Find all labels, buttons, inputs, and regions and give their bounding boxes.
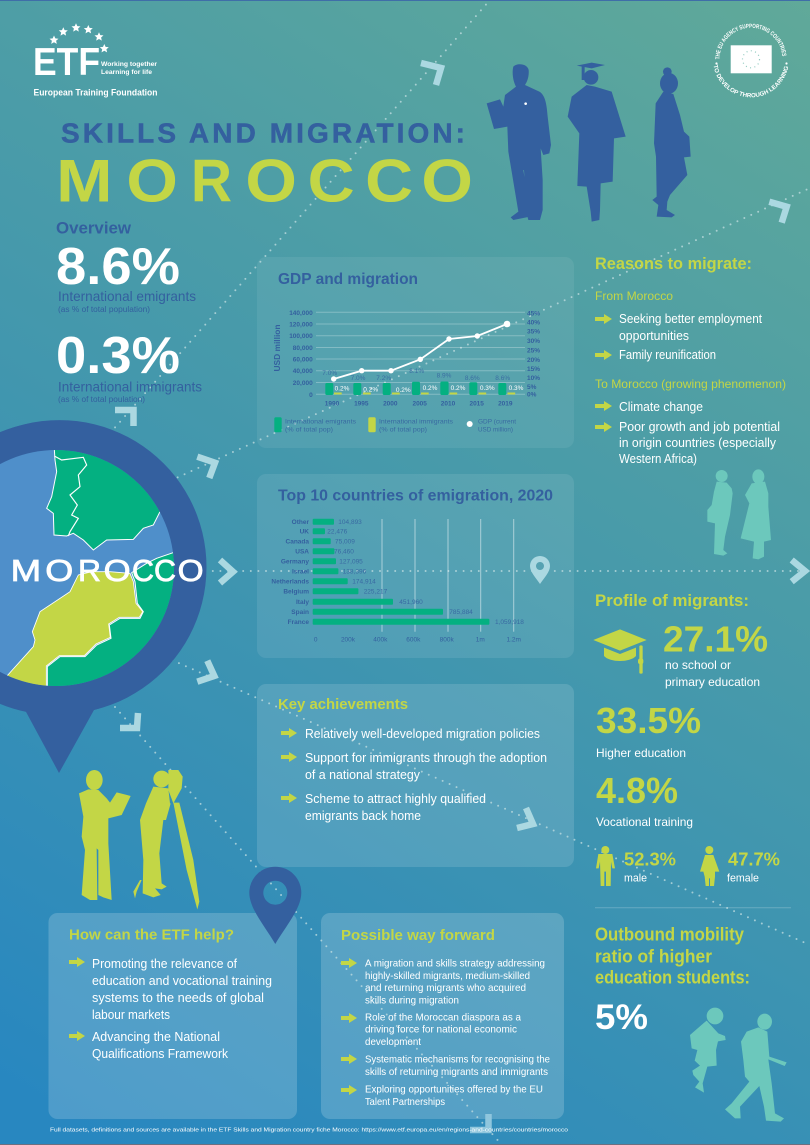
- panel: possible way forward background: [321, 913, 564, 1119]
- overview: [56, 218, 202, 404]
- bullets: [341, 958, 357, 1095]
- icon: EU agency emblem: THE EU AGENCY SUPPORTING COUNTRIES: [715, 24, 786, 60]
- x axis: [314, 637, 521, 644]
- x axis: 1995: [354, 401, 369, 408]
- possible way forward: A migration and skills strategy addressing: [365, 958, 545, 970]
- right axis: 40%: [527, 320, 540, 326]
- map: Morocco pin: [0, 420, 207, 773]
- horizontal bars: [313, 519, 489, 625]
- legend: USD million): [478, 426, 513, 434]
- country labels: [271, 519, 309, 626]
- value labels: 104,893: [338, 519, 362, 526]
- icon: graduation cap: [593, 629, 647, 674]
- region: Iberia: [46, 450, 160, 551]
- right axis: 45%: [527, 310, 540, 318]
- outbound mobility: ratio of higher: [595, 946, 712, 966]
- outbound mobility: Outbound mobility: [595, 925, 744, 945]
- panel: GDP and migration background: [257, 257, 574, 448]
- country labels: Netherlands: [271, 579, 309, 586]
- country labels: Other: [292, 519, 309, 526]
- immigrant percentage labels: [335, 385, 524, 394]
- outbound mobility: [595, 925, 750, 1037]
- bullets: [281, 728, 297, 803]
- x axis: 600k: [406, 637, 421, 644]
- stat: male: 52.3%: [624, 850, 676, 870]
- icon: logo stars: [50, 23, 109, 52]
- left axis: 80,000: [293, 345, 313, 352]
- stat: male: [624, 850, 676, 885]
- x axis: 1m: [476, 637, 485, 644]
- title country name: [56, 148, 473, 215]
- immigrant percentage labels: 0.2%: [335, 386, 350, 393]
- value labels: 75,009: [335, 539, 355, 546]
- key achievements: emigrants back home: [305, 809, 421, 823]
- map label: O: [104, 553, 131, 588]
- value labels: 127,095: [339, 559, 363, 566]
- country labels: UK: [300, 529, 309, 536]
- chart: top 10 countries of emigration: Top 10 countries of emigration, 2020: [278, 488, 553, 505]
- title: [56, 118, 473, 215]
- map label: C: [154, 553, 176, 588]
- country labels: Italy: [296, 599, 309, 606]
- GDP line: [331, 321, 510, 382]
- possible way forward: [341, 927, 550, 1108]
- legend: [274, 417, 516, 434]
- immigrant percentage labels: 0.3%: [480, 385, 495, 392]
- x axis: 2005: [412, 401, 427, 408]
- country labels: Israel: [292, 569, 309, 576]
- outbound mobility: 5%: [595, 998, 648, 1037]
- reasons to migrate: opportunities: [619, 329, 689, 343]
- possible way forward: skills of returning migrants and immigrants: [365, 1066, 548, 1078]
- left axis: 140,000: [289, 310, 313, 317]
- possible way forward: Possible way forward: [341, 927, 495, 944]
- emigrant bars: [325, 382, 506, 395]
- right axis: [527, 310, 540, 398]
- logo: ETF: [33, 23, 158, 99]
- right axis: 20%: [527, 357, 540, 364]
- reasons to migrate: From Morocco: [595, 289, 673, 303]
- reasons to migrate: To Morocco (growing phenomenon): [595, 377, 786, 391]
- x axis: 200k: [341, 637, 356, 644]
- left axis: 60,000: [293, 356, 313, 364]
- figures: couple talking: [707, 469, 771, 559]
- immigrant percentage labels: 0.3%: [509, 385, 524, 392]
- logo: ETF: ETF: [33, 41, 100, 84]
- legend: (% of total pop): [285, 426, 333, 434]
- country labels: USA: [295, 549, 309, 556]
- x axis: 2010: [441, 401, 456, 408]
- left axis: 20,000: [293, 380, 313, 387]
- country labels: Germany: [281, 559, 309, 566]
- figure: student: [652, 67, 691, 217]
- map label: O: [178, 553, 204, 588]
- logo: ETF: Learning for life: [101, 69, 152, 76]
- possible way forward: Exploring opportunities offered by the EU: [365, 1084, 543, 1096]
- title country name: C: [308, 148, 355, 215]
- key achievements: Key achievements: [278, 696, 408, 713]
- x axis: 2015: [469, 401, 484, 408]
- left axis: 0: [309, 392, 313, 399]
- stat: immigrants: International immigrants: [58, 379, 202, 395]
- profile of migrants: [593, 592, 780, 886]
- key achievements: Support for immigrants through the adoption: [305, 751, 547, 765]
- possible way forward: development: [365, 1036, 421, 1048]
- icon: location pin small: [530, 556, 550, 584]
- icon: EU agency emblem: TO DEVELOP THROUGH LEARNING: [714, 64, 788, 98]
- value labels: 785,884: [449, 609, 473, 616]
- x axis: 2000: [383, 401, 398, 408]
- value labels: 174,914: [352, 579, 376, 586]
- figures: walking students: [690, 1008, 787, 1122]
- chart: GDP and migration: GDP and migration: [278, 271, 418, 288]
- key achievements: Scheme to attract highly qualified: [305, 792, 486, 806]
- emigrant percentage labels: 7.0%: [322, 370, 337, 377]
- how can the ETF help: Promoting the relevance of: [92, 957, 238, 971]
- value labels: 22,476: [327, 529, 348, 536]
- stat: emigrants: International emigrants: [58, 288, 196, 304]
- legend: GDP (current: [478, 418, 516, 426]
- stat: immigrants: [56, 327, 202, 404]
- stat: no school: no school or: [665, 658, 731, 672]
- figure: graduate: [568, 63, 626, 222]
- stat: vocational training: Vocational training: [596, 815, 693, 829]
- map label: R: [78, 553, 101, 588]
- stat: female: 47.7%: [728, 850, 780, 870]
- immigrant percentage labels: 0.2%: [363, 386, 378, 394]
- stat: emigrants: 8.6%: [56, 238, 180, 296]
- stat: vocational training: 4.8%: [596, 770, 678, 811]
- left axis: 100,000: [289, 333, 313, 340]
- logo: ETF: Working together: [101, 61, 157, 68]
- icon: EU agency emblem: [714, 24, 788, 98]
- how can the ETF help: [69, 926, 272, 1061]
- immigrant percentage labels: 0.2%: [396, 387, 411, 394]
- x axis: 400k: [373, 637, 388, 644]
- profile of migrants: Profile of migrants:: [595, 592, 749, 610]
- reasons to migrate: Seeking better employment: [619, 312, 762, 326]
- bullets: [69, 957, 85, 1041]
- outbound mobility: education students:: [595, 967, 750, 987]
- bullets: [595, 314, 612, 432]
- stat: emigrants: (as % of total population): [58, 305, 150, 314]
- figure: man with theodolite: [133, 770, 199, 909]
- legend: International immigrants: [379, 418, 454, 426]
- left axis: [289, 310, 313, 399]
- panel: top 10 countries background: [257, 474, 574, 658]
- value labels: 225,217: [364, 589, 388, 596]
- route chevrons: [115, 63, 805, 1130]
- stat: emigrants: [56, 238, 196, 314]
- value labels: [327, 519, 524, 626]
- title country name: O: [126, 148, 178, 215]
- left axis: 40,000: [293, 368, 313, 375]
- map label: C: [132, 553, 154, 588]
- chart: GDP and migration: [273, 271, 540, 434]
- country labels: Spain: [291, 609, 309, 616]
- possible way forward: driving force for national economic: [365, 1024, 517, 1036]
- country labels: Belgium: [283, 589, 309, 596]
- legend: (% of total pop): [379, 426, 427, 434]
- title country name: O: [421, 148, 473, 215]
- right axis: 5%: [527, 384, 537, 391]
- reasons to migrate: Reasons to migrate:: [595, 255, 752, 273]
- how can the ETF help: education and vocational training: [92, 974, 272, 988]
- map label: [11, 553, 204, 588]
- reasons to migrate: Western Africa): [619, 452, 697, 466]
- reasons to migrate: Poor growth and job potential: [619, 420, 780, 434]
- key achievements: [278, 696, 547, 823]
- value labels: 76,460: [334, 549, 354, 556]
- map label: O: [45, 553, 73, 588]
- footer source note: Full datasets, definitions and sources are available in the ETF Skills and Migration country fiche Morocco: https://www.etf.europa.eu/en/regions-and-countries/countries/morocco: [50, 1128, 568, 1134]
- immigrant bars: [334, 392, 515, 394]
- overview: Overview: [56, 218, 132, 237]
- immigrant percentage labels: 0.2%: [451, 385, 466, 392]
- value labels: 138,396: [343, 569, 367, 576]
- icon: location pin large: [249, 867, 301, 944]
- key achievements: of a national strategy: [305, 768, 421, 782]
- border: Portugal: [54, 456, 87, 536]
- how can the ETF help: Qualifications Framework: [92, 1047, 229, 1061]
- possible way forward: and returning migrants who acquired: [365, 982, 526, 994]
- figures: professional silhouettes: [487, 63, 691, 222]
- stat: no school: 27.1%: [663, 619, 768, 660]
- possible way forward: skills during migration: [365, 994, 459, 1006]
- pin shape: [0, 420, 206, 773]
- key achievements: Relatively well-developed migration policies: [305, 727, 540, 741]
- stat: immigrants: (as % of total poulation): [58, 395, 145, 404]
- right axis: 0%: [527, 392, 537, 398]
- logo: ETF: European Training Foundation: [34, 88, 158, 98]
- region: Algeria: [46, 552, 174, 686]
- emigrant percentage labels: 7.2%: [376, 375, 391, 382]
- value labels: 451,960: [399, 599, 423, 606]
- title country name: C: [365, 148, 413, 215]
- stat: female: female: [727, 873, 759, 885]
- emigrant percentage labels: 8.9%: [437, 373, 452, 380]
- title country name: R: [191, 148, 232, 215]
- right axis: 10%: [527, 375, 540, 382]
- stat: male: male: [624, 873, 647, 885]
- figures: yellow surveyors: [79, 770, 199, 909]
- possible way forward: Role of the Moroccan diaspora as a: [365, 1012, 521, 1024]
- stat: no school: [663, 619, 768, 689]
- how can the ETF help: How can the ETF help?: [69, 926, 234, 943]
- emigrant percentage labels: 8.6%: [495, 375, 510, 382]
- stat: vocational training: [596, 770, 693, 829]
- x axis: [325, 401, 513, 408]
- chart: top 10 countries of emigration: [271, 488, 553, 644]
- possible way forward: highly-skilled migrants, medium-skilled: [365, 970, 530, 982]
- panel: how can the ETF help background: [48, 913, 297, 1119]
- region: Morocco: [7, 571, 143, 686]
- map label: M: [11, 553, 41, 588]
- legend: International emigrants: [285, 418, 357, 426]
- possible way forward: Systematic mechanisms for recognising the: [365, 1054, 550, 1066]
- x axis: 1990: [325, 401, 340, 408]
- right axis: 15%: [527, 366, 540, 373]
- axis title: USD million: [273, 324, 282, 372]
- title: SKILLS AND MIGRATION:: [61, 118, 465, 149]
- x axis: 0: [314, 637, 318, 644]
- stat: no school: primary education: [665, 675, 760, 689]
- title country name: O: [245, 148, 297, 215]
- how can the ETF help: systems to the needs of global: [92, 991, 264, 1005]
- reasons to migrate: in origin countries (especially: [619, 436, 777, 450]
- right axis: 35%: [527, 328, 540, 336]
- value labels: 1,059,918: [495, 619, 524, 626]
- country labels: France: [288, 619, 309, 626]
- how can the ETF help: Advancing the National: [92, 1030, 220, 1044]
- emigrant percentage labels: [322, 368, 510, 382]
- how can the ETF help: labour markets: [92, 1008, 170, 1022]
- emigrant percentage labels: 8.6%: [465, 375, 480, 382]
- immigrant percentage labels: 0.2%: [423, 385, 438, 392]
- panel: key achievements background: [257, 684, 574, 867]
- emigrant percentage labels: 8.1%: [409, 368, 424, 375]
- reasons to migrate: Family reunification: [619, 348, 716, 362]
- stat: higher education: Higher education: [596, 746, 686, 760]
- reasons to migrate: Climate change: [619, 400, 703, 414]
- possible way forward: Talent Partnerships: [365, 1096, 445, 1108]
- map circle: [0, 450, 174, 686]
- country labels: Canada: [286, 539, 309, 546]
- emigrant percentage labels: 7.0%: [351, 375, 366, 382]
- stat: female: [727, 850, 780, 885]
- reasons to migrate: [595, 255, 786, 466]
- right axis: 30%: [527, 338, 540, 345]
- x axis: 1.2m: [506, 637, 521, 644]
- stat: higher education: [596, 700, 701, 760]
- right axis: 25%: [527, 348, 540, 354]
- icon: male and female figures: [596, 846, 719, 886]
- x axis: 800k: [440, 637, 454, 644]
- stat: immigrants: 0.3%: [56, 327, 180, 385]
- figure: doctor: [487, 64, 551, 220]
- left axis: 120,000: [289, 322, 313, 328]
- stat: higher education: 33.5%: [596, 700, 701, 741]
- title country name: M: [56, 148, 113, 215]
- figure: woman with clipboard: [79, 770, 131, 900]
- x axis: 2019: [498, 401, 513, 408]
